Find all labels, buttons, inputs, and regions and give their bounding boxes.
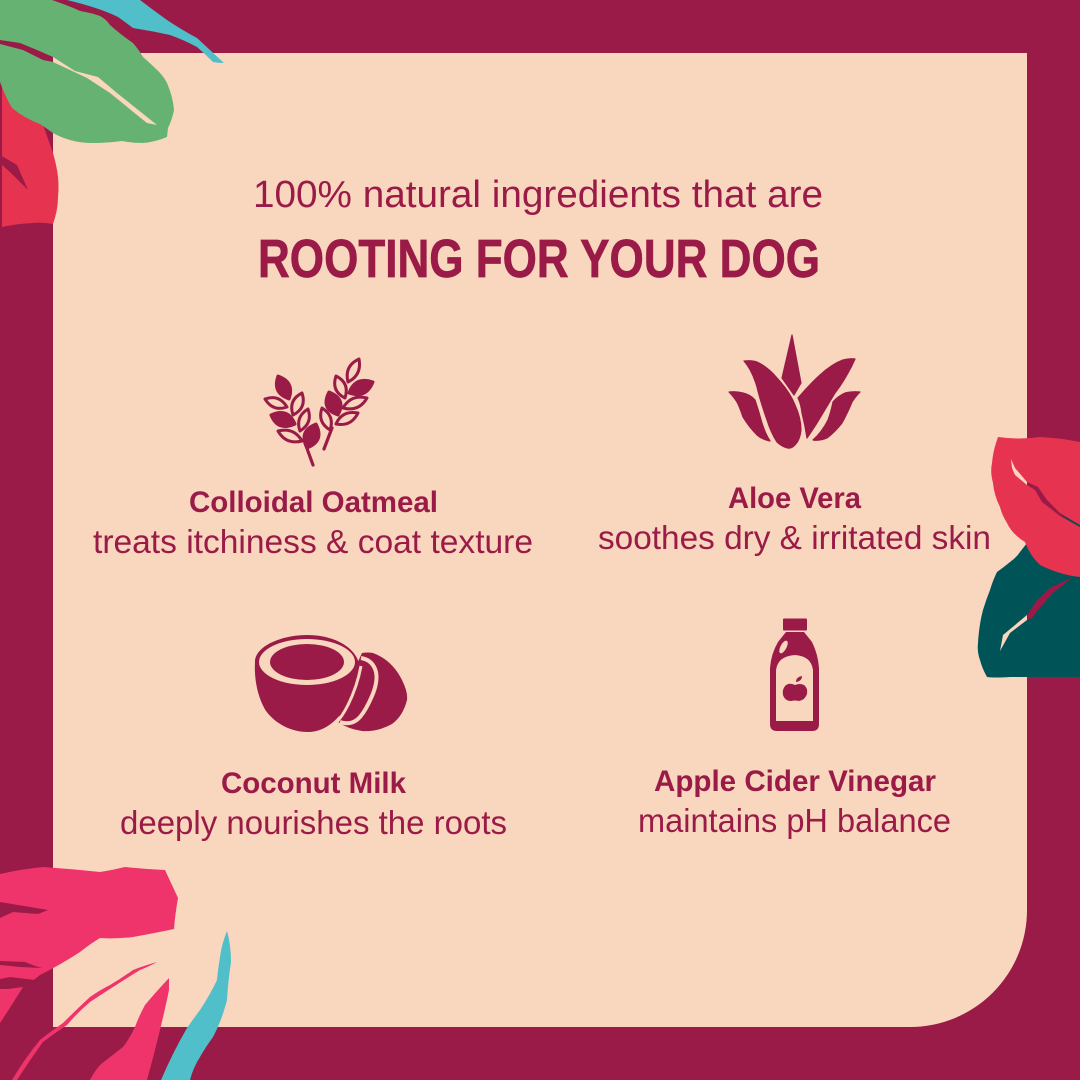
leaf: pink thin — [12, 962, 157, 1080]
label: coconut milk: Coconut Milk — [221, 767, 406, 800]
description: apple cider vinegar: maintains pH balance — [638, 802, 951, 839]
label: apple cider vinegar: Apple Cider Vinegar — [654, 765, 936, 798]
icon: bottle — [770, 618, 819, 731]
icon: coconut — [255, 635, 407, 732]
description: coconut milk: deeply nourishes the roots — [120, 804, 507, 841]
icon: aloe — [729, 335, 860, 448]
description: colloidal oatmeal: treats itchiness & coat texture — [93, 523, 533, 560]
leaf: teal — [161, 931, 231, 1080]
leaf: pink pointed — [90, 978, 169, 1080]
leaves: top left — [0, 0, 224, 227]
description: aloe vera: soothes dry & irritated skin — [598, 519, 991, 556]
leaf: dark teal — [978, 543, 1080, 678]
item: apple cider vinegar — [638, 618, 951, 839]
item: aloe vera — [598, 335, 991, 556]
leaf: red — [0, 85, 58, 227]
heading — [253, 174, 823, 289]
item: coconut milk — [120, 635, 507, 841]
heading: 100% natural ingredients that are — [253, 174, 823, 216]
label: colloidal oatmeal: Colloidal Oatmeal — [189, 486, 438, 519]
label: aloe vera: Aloe Vera — [728, 482, 861, 515]
item: colloidal oatmeal — [93, 359, 533, 560]
heading: ROOTING FOR YOUR DOG — [258, 229, 820, 289]
leaf: pink large — [0, 867, 178, 1023]
leaf: teal — [67, 0, 224, 63]
leaf: red — [991, 437, 1080, 577]
leaves: bottom left — [0, 867, 231, 1080]
leaves: right — [978, 437, 1080, 678]
icon: wheat — [265, 359, 373, 465]
leaf: green — [0, 0, 174, 143]
